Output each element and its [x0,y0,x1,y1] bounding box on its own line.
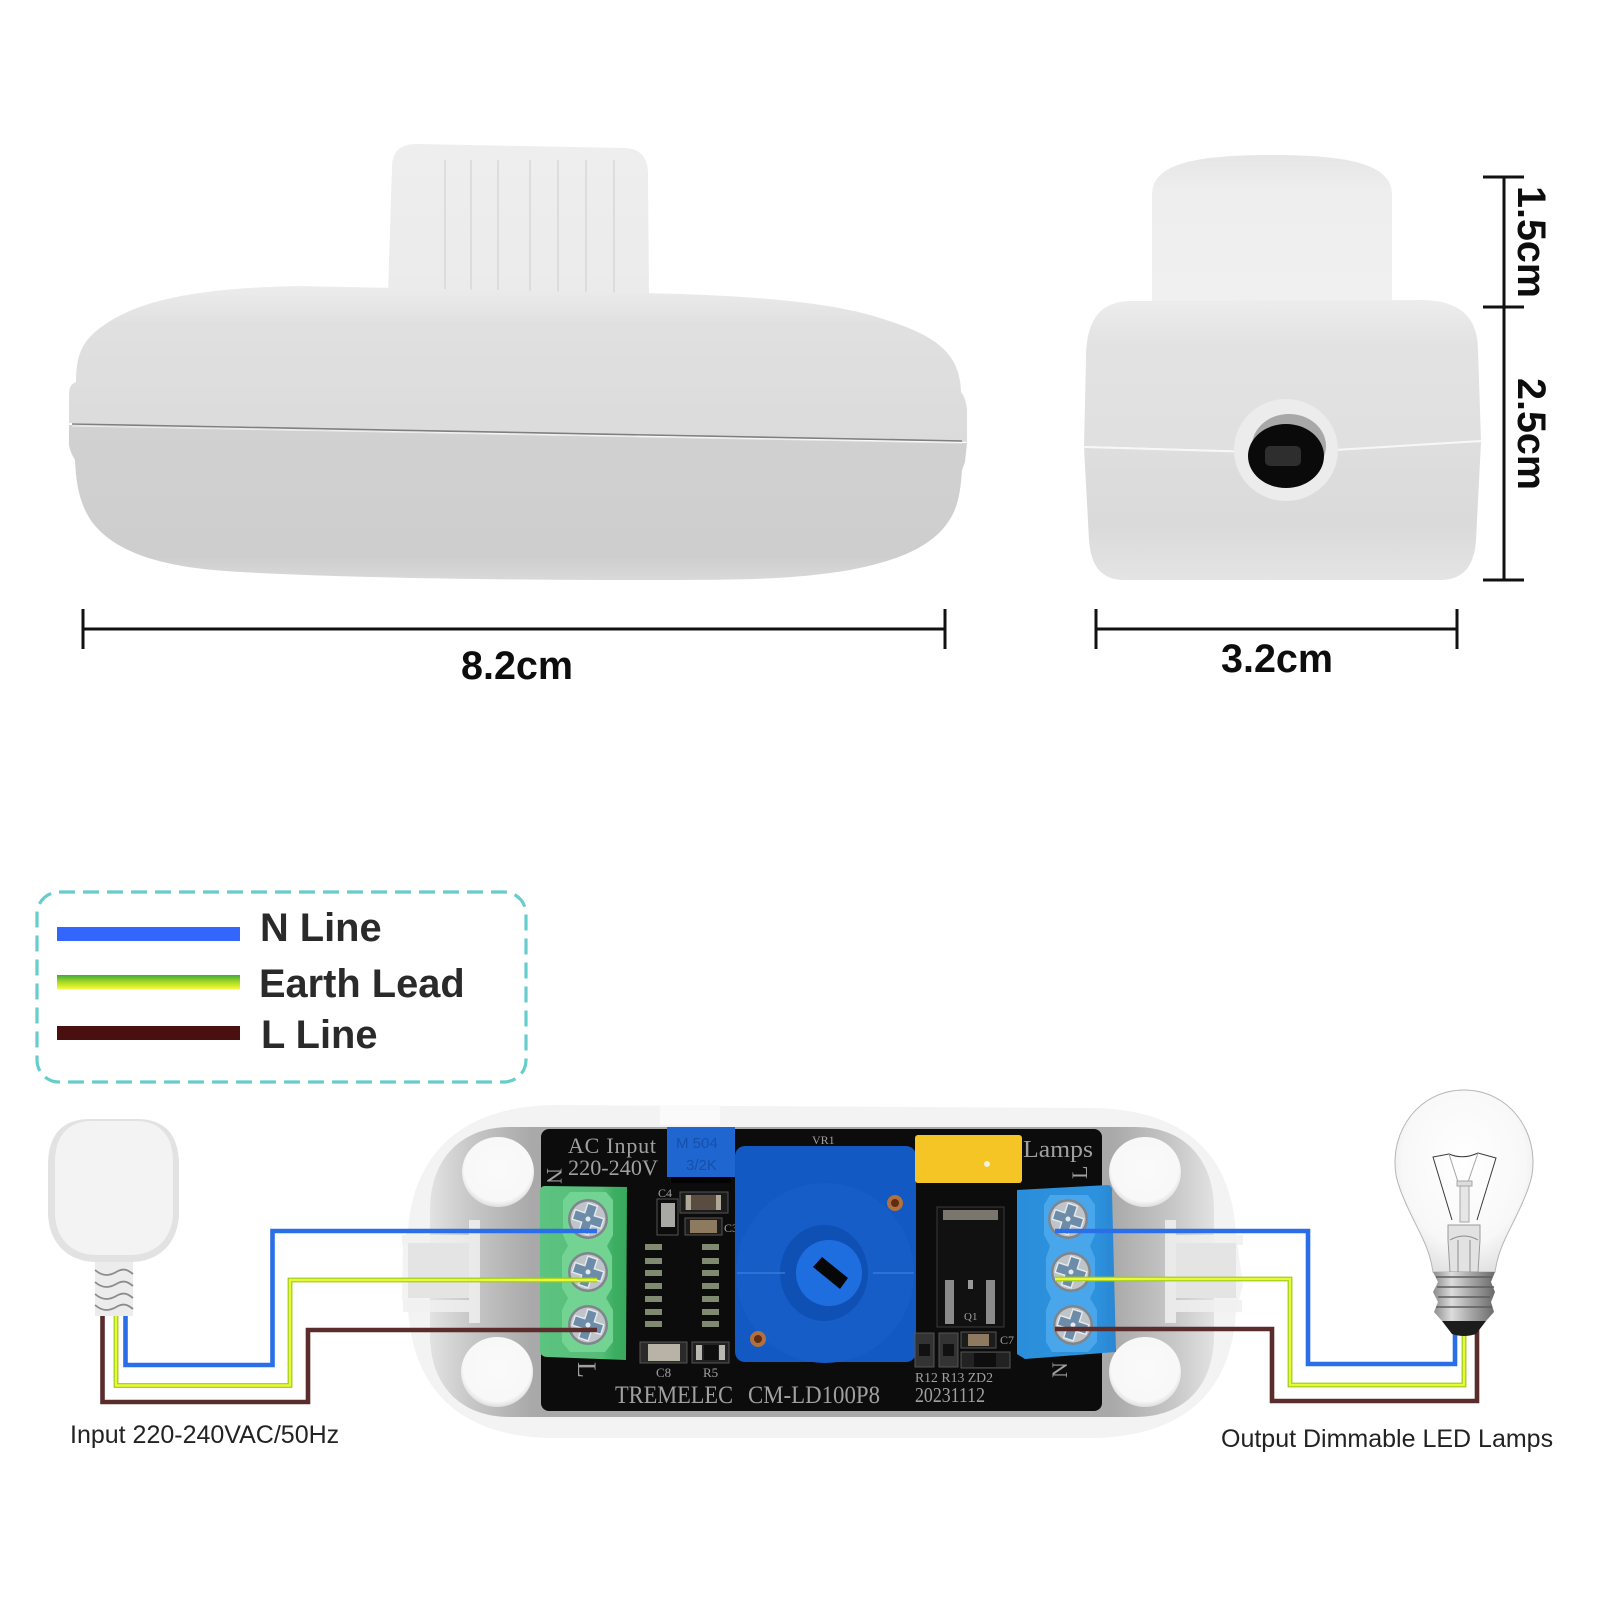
wires: input side [102,1231,597,1402]
small components: right of transistor [915,1332,1014,1386]
small components: left of potentiometer [640,1186,738,1380]
dimension: 3.2cm [1096,609,1457,681]
trimmer: blue: M 504 [676,1135,718,1152]
wire: input L [102,1316,597,1402]
legend entry: L Line: L Line [261,1013,377,1057]
seam line [72,424,962,443]
legend entry: L Line [57,1013,377,1057]
caption: output: Output Dimmable LED Lamps [1221,1425,1553,1453]
legend entry: Earth Lead [57,962,465,1006]
board labels: N and L terminals: N [1047,1362,1072,1378]
terminal block: green input [540,1186,627,1360]
small components: left of potentiometer: R5 [703,1365,718,1380]
board text: Lamps: Lamps [1023,1137,1093,1163]
legend entry: N Line [57,906,382,950]
body: upper shell [1084,300,1481,452]
dimension: 8.2cm [83,609,945,688]
dimension: 8.2cm: 8.2cm [461,644,573,688]
trimmer: blue: 3/2K [686,1157,717,1174]
bulb screw base [1433,1272,1495,1336]
small components: left of potentiometer: C3 [724,1221,738,1235]
seam line [1084,441,1481,453]
potentiometer [735,1146,916,1363]
body: upper shell [69,286,967,442]
board text: model number: CM-LD100P8 [748,1382,880,1409]
board labels: N and L terminals: L [572,1362,601,1378]
body: lower shell [1084,442,1481,580]
icon: mains plug [48,1119,179,1316]
housing: mounting posts [461,1137,1181,1407]
dimension: heights 1.5cm and 2.5cm: 2.5cm [1509,378,1553,490]
legend entry: N Line: N Line [260,906,382,950]
panel: front view of dimmer [1084,155,1481,580]
board text: AC Input: 220-240V [568,1155,658,1180]
board text: model number [615,1382,880,1409]
housing: outer shell [402,1105,1243,1438]
wire: output N [1055,1231,1455,1364]
transistor Q1: Q1 [964,1311,977,1323]
icon: cord hole [1234,399,1338,501]
wire: output earth [1055,1279,1464,1385]
board text: date code: 20231112 [915,1383,985,1407]
bulb glass [1395,1090,1533,1272]
wire: input N [126,1231,597,1365]
knob: side view with ribs [388,144,649,298]
knob: front view [1152,155,1392,303]
dimension: heights 1.5cm and 2.5cm [1483,177,1553,580]
legend frame [37,892,526,1082]
legend entry: Earth Lead: Earth Lead [259,962,465,1006]
small components: right of transistor: R12 R13 ZD2 [915,1371,993,1386]
trimmer: blue [667,1127,735,1183]
body: lower shell [69,425,967,580]
icon: light bulb [1395,1090,1533,1336]
transistor Q1 [937,1207,1004,1327]
wire: input earth [116,1280,597,1386]
capacitor: yellow [915,1135,1022,1183]
small components: right of transistor: C7 [1000,1333,1014,1347]
board labels: N and L terminals: N [542,1168,567,1184]
panel: side view of dimmer [69,144,967,580]
board text: model number: TREMELEC [615,1382,733,1409]
wire: output L [1055,1326,1477,1401]
board labels: N and L terminals [542,1166,1092,1378]
board text: AC Input [568,1133,658,1180]
board text: VR1: VR1 [812,1133,835,1147]
small components: left of potentiometer: C8 [656,1365,671,1380]
board text: AC Input: AC Input [568,1133,656,1158]
circuit board [541,1129,1102,1411]
bulb filament and stem [1433,1153,1496,1272]
terminal block: blue output [1017,1185,1116,1359]
housing: inner cavity [430,1127,1214,1417]
small components: left of potentiometer: C4 [658,1186,672,1200]
panel: dimmer circuit board in open housing [402,1105,1243,1438]
board labels: N and L terminals: L [1067,1166,1092,1179]
dimension: heights 1.5cm and 2.5cm: 1.5cm [1509,186,1553,298]
housing: side tabs [402,1220,1243,1323]
wires: output side [1055,1231,1477,1401]
dimension: 3.2cm: 3.2cm [1221,637,1333,681]
integrated circuit pins [645,1244,719,1327]
caption: input: Input 220-240VAC/50Hz [70,1421,339,1449]
legend: wire colours [37,892,526,1082]
